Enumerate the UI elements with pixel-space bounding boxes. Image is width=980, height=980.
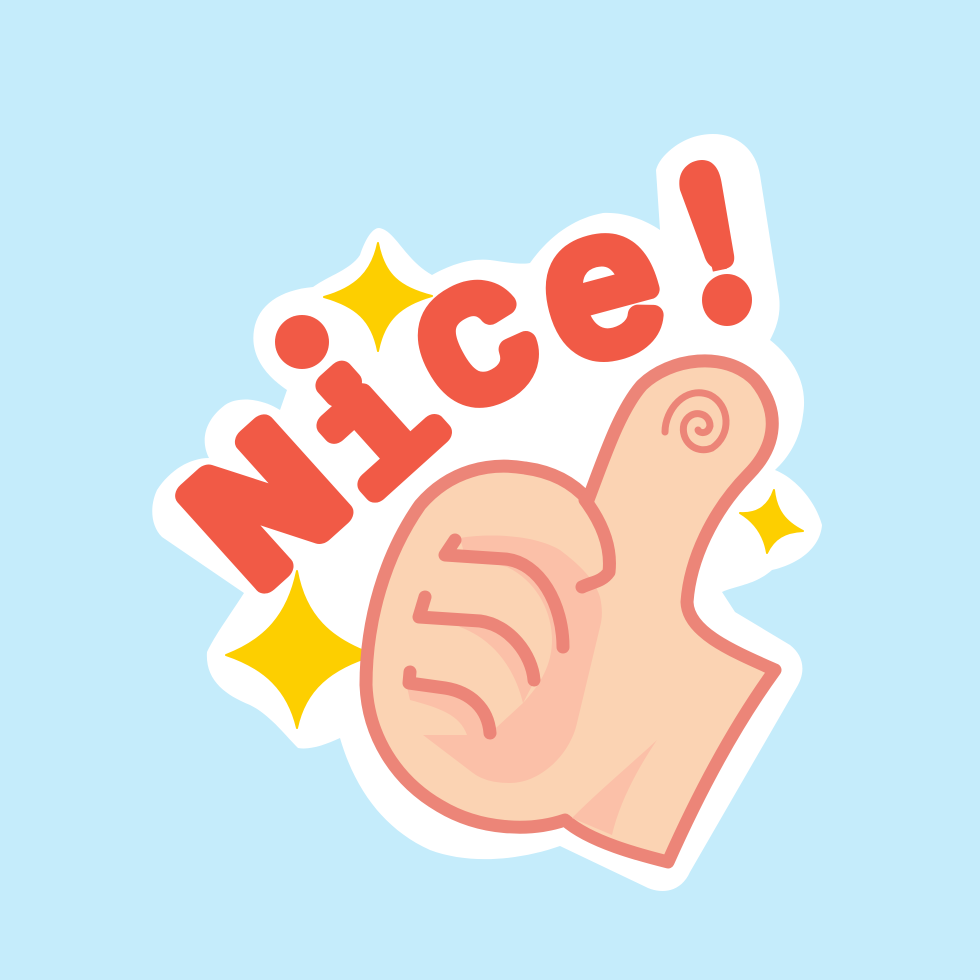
wrist crease shadow: [572, 740, 657, 835]
heading: Nice!: !: [635, 133, 799, 380]
finger shadow: [455, 622, 534, 703]
finger line 1: [445, 540, 563, 647]
finger line 3: [409, 672, 490, 733]
palm shadow: [407, 536, 602, 783]
sparkle: large lower-left star: [226, 571, 375, 728]
heading: Nice!: [154, 133, 799, 634]
finger line 2: [419, 597, 534, 680]
thumbnail spiral: [665, 393, 726, 450]
heading: Nice!: e: [518, 174, 690, 422]
sparkle: top yellow star: [324, 243, 432, 351]
white sticker backing: [152, 134, 822, 891]
heading: Nice!: c: [375, 221, 580, 467]
sparkle: small right star: [740, 490, 803, 553]
hand: thumbs up: [366, 361, 775, 862]
thumb knuckle line: [582, 500, 609, 587]
hand base: [366, 361, 775, 862]
heading: Nice!: i: [282, 333, 478, 534]
heading: Nice!: N: [154, 392, 391, 634]
